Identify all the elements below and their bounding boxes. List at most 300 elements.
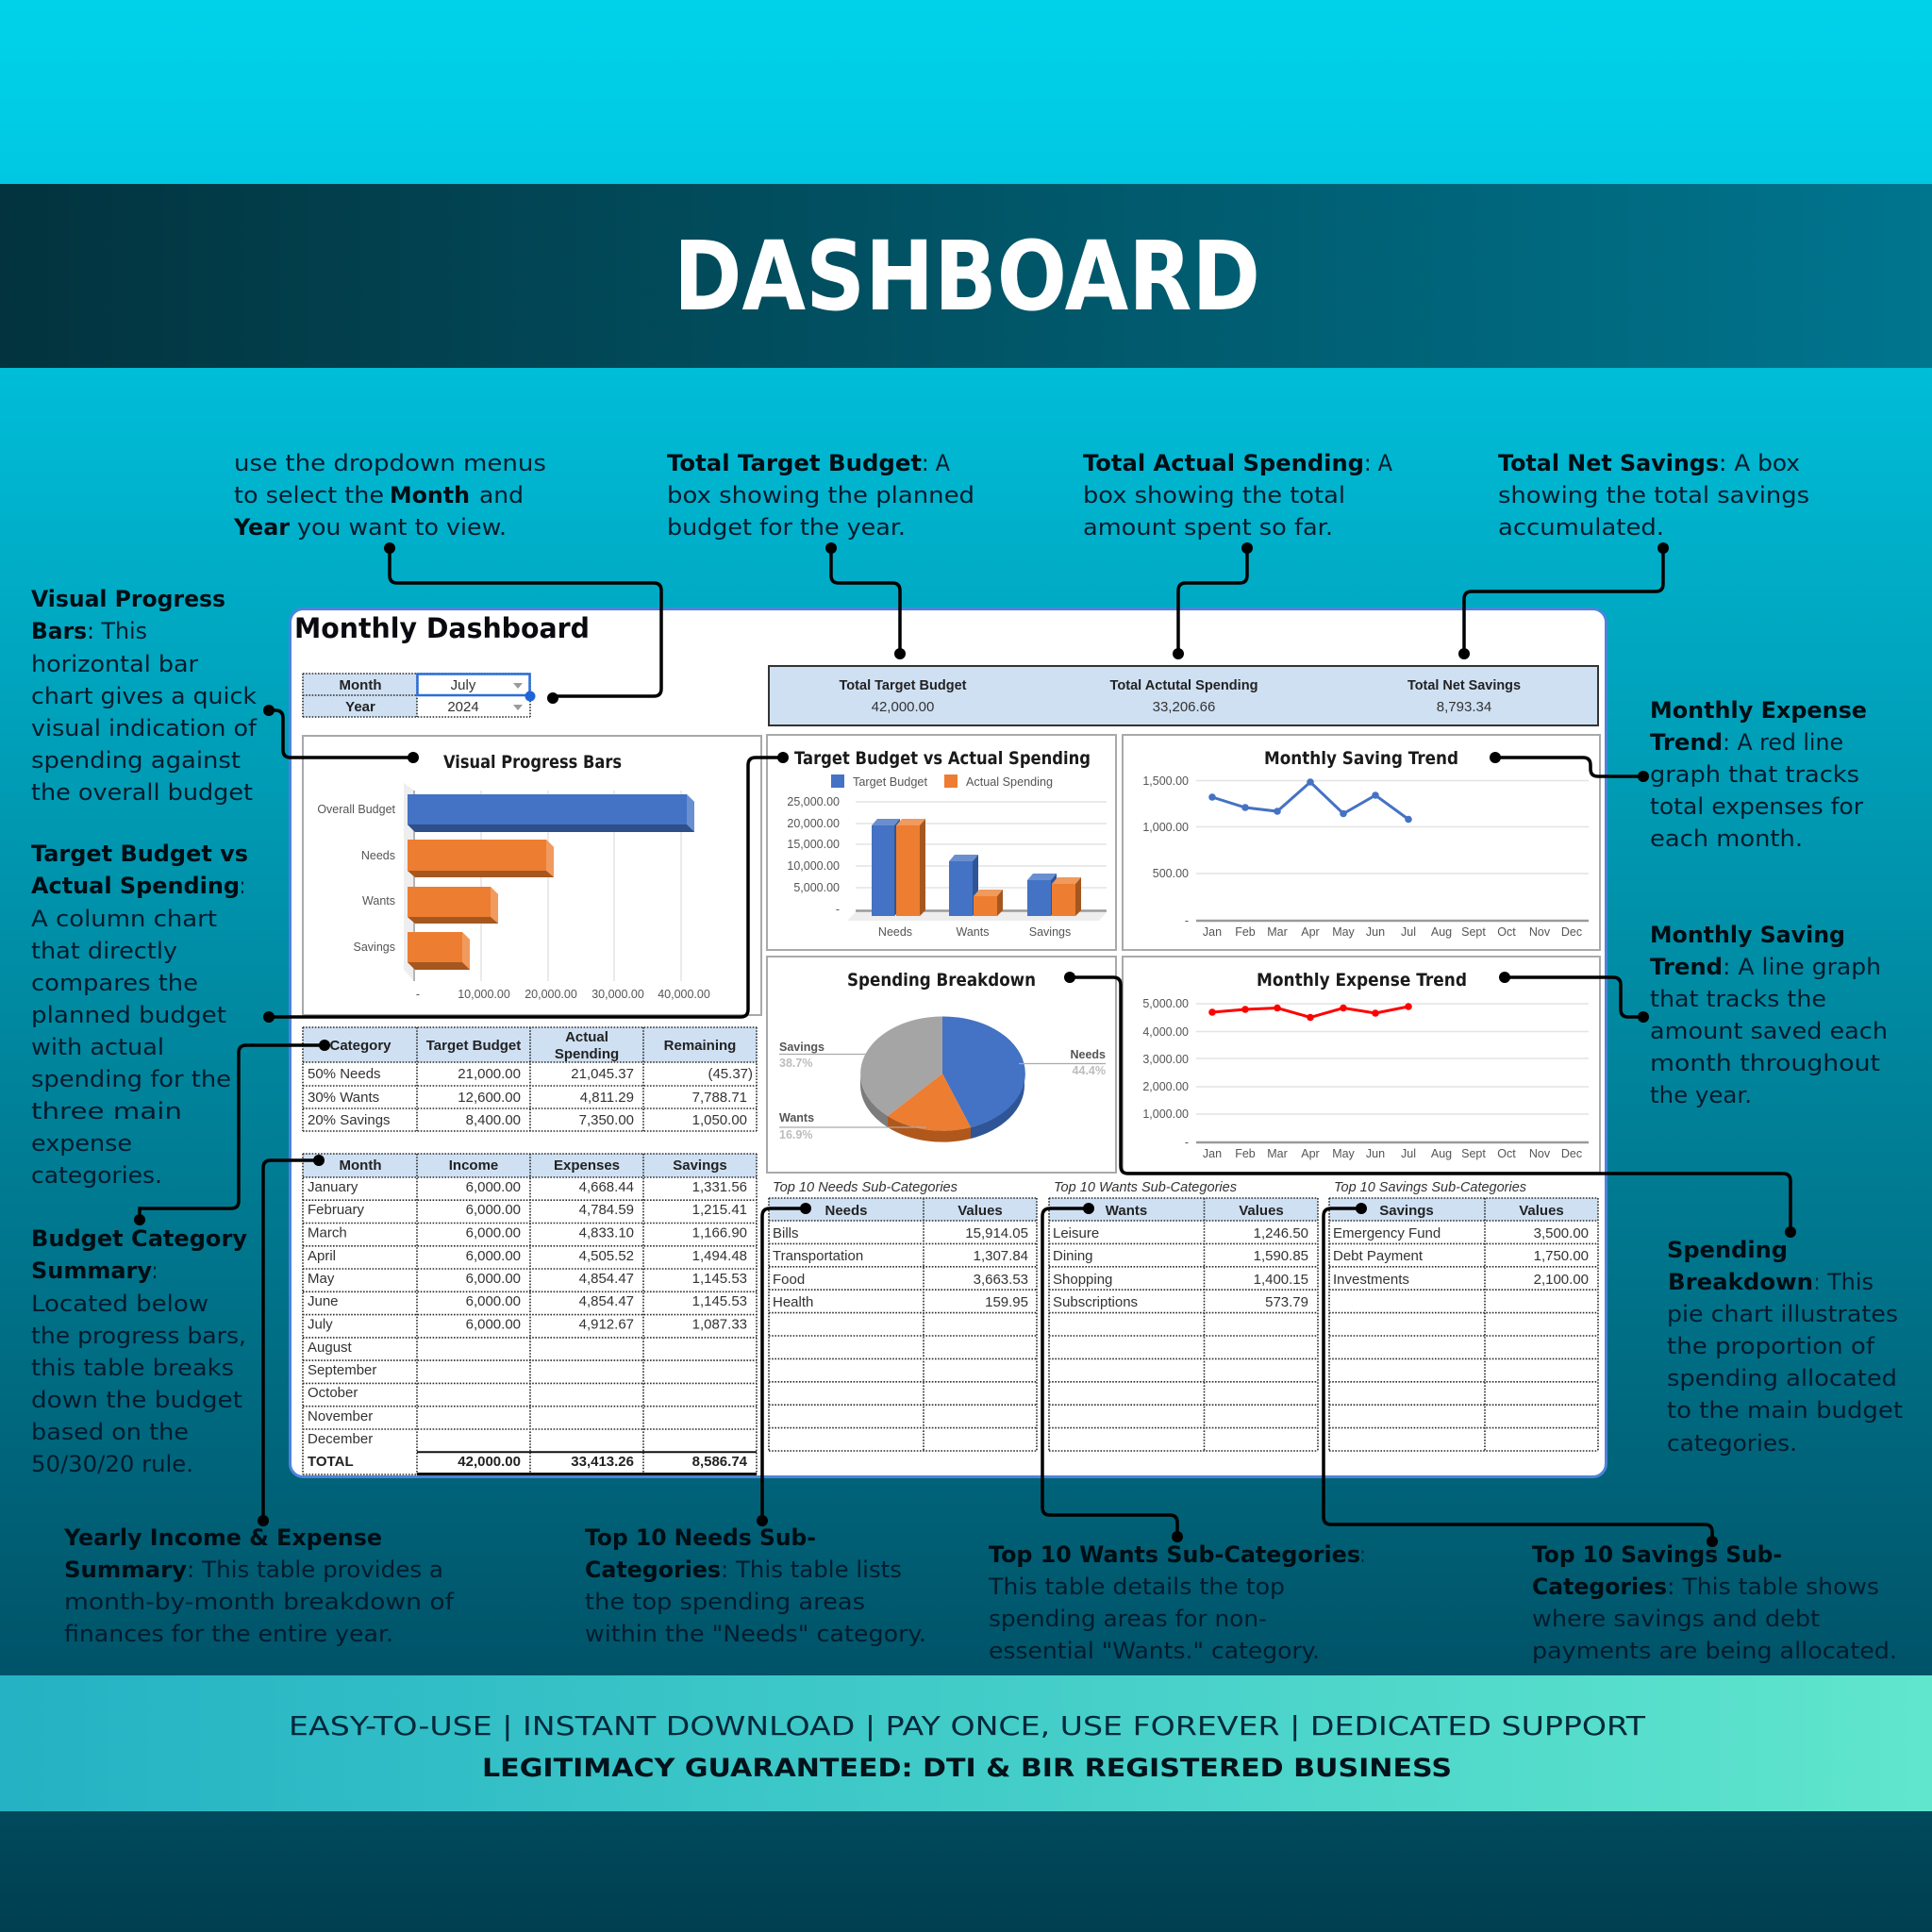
bottom dark band [0, 1811, 1932, 1932]
chart: target budget vs actual spending: Wants [957, 925, 989, 939]
callout: yearly income and expense summary: finances for the entire year. [64, 1621, 393, 1647]
callout: target budget vs actual spending: compares the [31, 970, 198, 996]
chart: monthly saving trend: Sept [1461, 925, 1486, 939]
table: yearly income and expense summary: June [308, 1293, 339, 1309]
table: top 10 needs: 159.95 [985, 1294, 1028, 1310]
callout: spending breakdown: Spending [1667, 1237, 1788, 1263]
table: budget category summary: 1,050.00 [692, 1112, 747, 1128]
chart: monthly expense trend: Monthly Expense Trend [1257, 970, 1467, 991]
callout: budget category summary: based on the [31, 1419, 189, 1445]
callout: spending breakdown: to the main budget [1667, 1397, 1903, 1424]
callout: dropdown menus: you want to view. [297, 514, 507, 541]
arrow: top needs connector [757, 1203, 811, 1526]
callout: target budget vs actual spending: that directly [31, 938, 177, 964]
callout: target budget vs actual spending: planned budget [31, 1002, 226, 1028]
table: yearly income and expense summary: 1,331.56 [692, 1179, 747, 1195]
callout: monthly expense trend: total expenses for [1650, 793, 1863, 820]
callout: budget category summary: : [152, 1257, 158, 1284]
chart: monthly expense trend: - [1185, 1136, 1189, 1149]
table: yearly income and expense summary: 1,145.53 [692, 1293, 747, 1309]
table: budget category summary: 7,350.00 [579, 1112, 634, 1128]
chart: monthly expense trend: May [1332, 1147, 1356, 1160]
chart: spending breakdown pie: Wants [779, 1111, 814, 1124]
chart: monthly saving trend: 1,000.00 [1142, 821, 1189, 834]
table: yearly income and expense summary: TOTAL [308, 1454, 354, 1470]
chart: visual progress bars: - [416, 988, 420, 1001]
summary box: totals: Total Net Savings [1407, 677, 1521, 693]
table: yearly income and expense summary: 6,000.00 [466, 1248, 521, 1264]
callout: total net savings [1498, 450, 1809, 541]
callout: monthly expense trend: : A red line [1723, 729, 1843, 756]
chart: monthly expense trend: 2,000.00 [1142, 1080, 1189, 1093]
chart: monthly expense trend: 4,000.00 [1142, 1025, 1189, 1039]
table: yearly income and expense summary: Expenses [554, 1158, 620, 1174]
callout: monthly expense trend: Trend [1650, 729, 1723, 756]
arrow: spending breakdown connector [1064, 972, 1796, 1238]
table: top 10 wants: Leisure [1053, 1225, 1099, 1241]
callout: target budget vs actual spending: A column chart [31, 906, 217, 932]
chart: target budget vs actual spending: 15,000.00 [787, 838, 840, 851]
month and year selector: Year [345, 699, 375, 715]
callout: monthly saving trend: Monthly Saving [1650, 922, 1845, 948]
chart: visual progress bars: Overall Budget [317, 803, 396, 816]
callout: budget category summary: Budget Category [31, 1225, 247, 1252]
table: top 10 needs: Values [958, 1203, 1003, 1219]
arrow: total net savings connector [1458, 542, 1669, 659]
chart: spending breakdown pie [767, 957, 1116, 1173]
callout: visual progress bars: visual indication of [31, 715, 258, 741]
callout: total target budget: Total Target Budget [667, 450, 922, 476]
chart: monthly saving trend: Oct [1497, 925, 1516, 939]
table: budget category summary: 7,788.71 [692, 1090, 747, 1106]
arrow: total actual spending connector [1173, 542, 1253, 659]
chart: target budget vs actual spending: Needs [878, 925, 912, 939]
table: yearly income and expense summary: March [308, 1224, 347, 1241]
chart: spending breakdown pie: 16.9% [779, 1128, 812, 1141]
table: top 10 wants: Wants [1106, 1203, 1147, 1219]
table: yearly income and expense summary: 42,000.00 [458, 1454, 521, 1470]
callout: visual progress bars: the overall budget [31, 779, 253, 806]
table: top 10 savings: 3,500.00 [1534, 1225, 1589, 1241]
callout: monthly expense trend: each month. [1650, 825, 1803, 852]
chart: monthly saving trend: 1,500.00 [1142, 774, 1189, 788]
table: budget category summary: Actual [565, 1029, 608, 1045]
chart: target budget vs actual spending: 20,000.00 [787, 817, 840, 830]
arrow: top savings connector [1324, 1203, 1718, 1547]
table: yearly income and expense summary: October [308, 1385, 358, 1401]
table: budget category summary: 50% Needs [308, 1066, 381, 1082]
callout: visual progress bars: : This [87, 618, 147, 644]
arrow: month and year connector [384, 542, 661, 704]
callout: target budget vs actual spending: three main [31, 1098, 182, 1124]
table: top 10 savings [1329, 1179, 1598, 1451]
chart: spending breakdown pie: Savings [779, 1041, 824, 1054]
callout: monthly expense trend [1650, 697, 1867, 852]
chart: monthly expense trend: 5,000.00 [1142, 997, 1189, 1010]
table: top 10 wants: Dining [1053, 1248, 1093, 1264]
callout: monthly expense trend: graph that tracks [1650, 761, 1859, 788]
table: yearly income and expense summary: 6,000.00 [466, 1271, 521, 1287]
table: budget category summary [303, 1027, 757, 1131]
callout: dropdown menus: Month [390, 482, 470, 508]
callout: visual progress bars: Bars [31, 618, 87, 644]
callout: spending breakdown: pie chart illustrates [1667, 1301, 1898, 1327]
table: top 10 savings: Values [1519, 1203, 1564, 1219]
table: yearly income and expense summary: Savings [673, 1158, 727, 1174]
month and year selector: Month [340, 677, 381, 693]
summary box: totals: Total Target Budget [840, 677, 966, 693]
callout: total target budget: box showing the planned [667, 482, 974, 508]
callout: monthly saving trend: Trend [1650, 954, 1723, 980]
arrow: budget category summary connector [134, 1040, 330, 1225]
callout: top 10 needs: the top spending areas [585, 1589, 865, 1615]
table: yearly income and expense summary: 8,586.74 [692, 1454, 748, 1470]
callout: target budget vs actual spending: categories. [31, 1162, 162, 1189]
table: yearly income and expense summary: 4,505.52 [579, 1248, 634, 1264]
table: top 10 savings: Debt Payment [1333, 1248, 1424, 1264]
callout: monthly saving trend: amount saved each [1650, 1018, 1888, 1044]
chart: monthly expense trend: Mar [1267, 1147, 1288, 1160]
table: yearly income and expense summary [303, 1154, 757, 1474]
footer band: EASY-TO-USE | INSTANT DOWNLOAD | PAY ONCE, USE FOREVER | DEDICATED SUPPORT [289, 1710, 1646, 1741]
chart: monthly expense trend: Nov [1529, 1147, 1551, 1160]
table: top 10 wants: 1,590.85 [1254, 1248, 1308, 1264]
table: top 10 wants [1049, 1179, 1318, 1451]
chart: spending breakdown pie: 38.7% [779, 1057, 812, 1070]
callout: target budget vs actual spending [31, 841, 248, 1189]
callout: yearly income and expense summary: Yearly Income & Expense [63, 1524, 382, 1551]
table: top 10 needs: 3,663.53 [974, 1272, 1028, 1288]
table: yearly income and expense summary: 1,215.41 [692, 1202, 747, 1218]
table: budget category summary: Remaining [664, 1038, 736, 1054]
callout: total actual spending: box showing the total [1083, 482, 1345, 508]
callout: top 10 needs: Top 10 Needs Sub- [585, 1524, 816, 1551]
table: top 10 savings: 1,750.00 [1534, 1248, 1589, 1264]
callout: top 10 savings: Categories [1532, 1574, 1667, 1600]
callout: spending breakdown: This [1826, 1269, 1874, 1295]
chart: monthly saving trend: Jul [1401, 925, 1416, 939]
table: yearly income and expense summary: Month [340, 1158, 381, 1174]
arrow: total target budget connector [825, 542, 906, 659]
table: yearly income and expense summary: 4,668.44 [579, 1179, 634, 1195]
table: budget category summary: Target Budget [426, 1038, 521, 1054]
callout: dropdown menus: use the dropdown menus [234, 450, 546, 476]
table: yearly income and expense summary: April [308, 1248, 336, 1264]
callout: spending breakdown: categories. [1667, 1430, 1797, 1457]
chart: target budget vs actual spending: 10,000.00 [787, 859, 840, 873]
chart: target budget vs actual spending [767, 735, 1116, 950]
callout: budget category summary: Summary [31, 1257, 152, 1284]
callout: dropdown menus: Year [233, 514, 290, 541]
chart: monthly saving trend: Jan [1203, 925, 1222, 939]
table: yearly income and expense summary: August [308, 1340, 353, 1356]
table: budget category summary: 20% Savings [308, 1112, 391, 1128]
table: yearly income and expense summary: 6,000.00 [466, 1293, 521, 1309]
chart: monthly saving trend: Dec [1561, 925, 1582, 939]
table: yearly income and expense summary: 4,854.47 [579, 1271, 634, 1287]
callout: target budget vs actual spending: Target Budget vs [31, 841, 248, 867]
callout: total net savings: Total Net Savings [1498, 450, 1719, 476]
callout: target budget vs actual spending: with actual [31, 1034, 164, 1060]
callout: top 10 wants: Top 10 Wants Sub-Categories [989, 1541, 1360, 1568]
table: yearly income and expense summary: December [308, 1431, 373, 1447]
chart: monthly saving trend: Mar [1267, 925, 1288, 939]
callout: budget category summary: Located below [31, 1291, 208, 1317]
callout: monthly saving trend: : A line graph [1723, 954, 1881, 980]
footer band [0, 1675, 1932, 1811]
callout: total net savings: : A box [1719, 450, 1800, 476]
chart: monthly expense trend: 3,000.00 [1142, 1053, 1189, 1066]
chart: monthly saving trend: Feb [1235, 925, 1256, 939]
callout: monthly expense trend: Monthly Expense [1650, 697, 1867, 724]
callout: target budget vs actual spending: spending for the [31, 1066, 231, 1092]
callout: spending breakdown: spending allocated [1667, 1365, 1897, 1391]
arrow: monthly expense trend connector [1490, 752, 1649, 782]
arrow: yearly summary connector [258, 1155, 325, 1526]
table: yearly income and expense summary: 1,145.53 [692, 1271, 747, 1287]
callout: visual progress bars: horizontal bar [31, 651, 198, 677]
callout: top 10 savings [1532, 1541, 1897, 1664]
chart: visual progress bars: 10,000.00 [458, 988, 510, 1001]
chart: visual progress bars: 20,000.00 [525, 988, 577, 1001]
arrow: monthly saving trend connector [1499, 972, 1649, 1023]
table: yearly income and expense summary: 4,854.47 [579, 1293, 634, 1309]
panel: dashboard card [291, 609, 1606, 1477]
table: top 10 savings: Investments [1333, 1272, 1409, 1288]
callout: budget category summary: 50/30/20 rule. [31, 1451, 193, 1477]
callout: target budget vs actual spending: expense [31, 1130, 132, 1157]
chart: spending breakdown pie: 44.4% [1073, 1064, 1106, 1077]
callout: monthly saving trend: month throughout [1650, 1050, 1880, 1076]
callout: top 10 needs: Categories [585, 1557, 721, 1583]
chart: spending breakdown pie: Spending Breakdown [847, 970, 1036, 991]
table: top 10 wants: Subscriptions [1053, 1294, 1138, 1310]
table: top 10 needs: Needs [824, 1203, 868, 1219]
callout: total actual spending [1083, 450, 1393, 541]
table: top 10 wants: Values [1239, 1203, 1284, 1219]
table: top 10 savings: Top 10 Savings Sub-Categories [1334, 1179, 1526, 1195]
chart: visual progress bars: 30,000.00 [591, 988, 644, 1001]
chart: monthly expense trend: Apr [1301, 1147, 1320, 1160]
chart: visual progress bars: 40,000.00 [658, 988, 710, 1001]
summary box: totals: 42,000.00 [872, 699, 934, 715]
callout: top 10 needs [585, 1524, 926, 1647]
table: yearly income and expense summary: November [308, 1408, 373, 1424]
chart: monthly expense trend: Jun [1366, 1147, 1385, 1160]
table: top 10 needs: 15,914.05 [965, 1225, 1028, 1241]
table: yearly income and expense summary: January [308, 1179, 358, 1195]
chart: target budget vs actual spending: Target Budget vs Actual Spending [794, 748, 1091, 769]
table: top 10 wants: 1,400.15 [1254, 1272, 1308, 1288]
callout: top 10 savings: payments are being allocated. [1532, 1638, 1897, 1664]
summary box: totals: 8,793.34 [1437, 699, 1491, 715]
callout: total net savings: showing the total savings [1498, 482, 1809, 508]
chart: spending breakdown pie: Needs [1070, 1048, 1106, 1061]
chart: monthly saving trend: Jun [1366, 925, 1385, 939]
table: budget category summary: 21,000.00 [458, 1066, 521, 1082]
table: top 10 needs: 1,307.84 [974, 1248, 1028, 1264]
table: budget category summary: Category [329, 1038, 391, 1054]
chart: monthly expense trend: Dec [1561, 1147, 1582, 1160]
table: top 10 savings: Emergency Fund [1333, 1225, 1441, 1241]
chart: monthly saving trend: Monthly Saving Trend [1264, 748, 1458, 769]
chart: monthly saving trend: May [1332, 925, 1356, 939]
chart: monthly saving trend: Apr [1301, 925, 1320, 939]
summary box: totals [769, 666, 1598, 725]
callout: dropdown menus: and [479, 482, 524, 508]
callout: total target budget: : A [922, 450, 951, 476]
callout: top 10 wants: : [1360, 1541, 1365, 1568]
table: budget category summary: 30% Wants [308, 1090, 379, 1106]
chart: monthly expense trend: Jan [1203, 1147, 1222, 1160]
callout: monthly saving trend [1650, 922, 1888, 1108]
callout: spending breakdown: the proportion of [1667, 1333, 1875, 1359]
table: yearly income and expense summary: 6,000.00 [466, 1317, 521, 1332]
callout: yearly income and expense summary: month-by-month breakdown of [64, 1589, 455, 1615]
callout: top 10 savings: where savings and debt [1532, 1606, 1820, 1632]
callout: visual progress bars [31, 586, 258, 806]
table: yearly income and expense summary: 6,000.00 [466, 1179, 521, 1195]
arrow: visual progress bars connector [263, 705, 419, 763]
heading: Monthly Dashboard: Monthly Dashboard [294, 612, 590, 644]
callout: top 10 needs: within the "Needs" category. [585, 1621, 926, 1647]
summary box: totals: Total Actutal Spending [1109, 677, 1258, 693]
table: yearly income and expense summary: September [308, 1362, 376, 1378]
callout: top 10 wants [988, 1541, 1365, 1664]
callout: spending breakdown: : [1814, 1269, 1820, 1295]
table: top 10 needs: Health [773, 1294, 813, 1310]
callout: budget category summary: this table breaks [31, 1355, 234, 1381]
chart: monthly expense trend: Sept [1461, 1147, 1486, 1160]
callout: monthly saving trend: that tracks the [1650, 986, 1826, 1012]
callout: visual progress bars: Visual Progress [31, 586, 225, 612]
chart: visual progress bars: Visual Progress Bars [443, 752, 622, 773]
arrow: top wants connector [1042, 1203, 1183, 1542]
chart: visual progress bars: Needs [361, 849, 395, 862]
chart: monthly expense trend [1123, 957, 1600, 1173]
table: budget category summary: (45.37) [708, 1066, 753, 1082]
chart: target budget vs actual spending: - [836, 903, 840, 916]
callout: top 10 wants: This table details the top [988, 1574, 1285, 1600]
table: yearly income and expense summary: 33,413.26 [571, 1454, 634, 1470]
month and year selector [303, 674, 536, 717]
callout: spending breakdown: Breakdown [1668, 1269, 1813, 1295]
callout: dropdown menus: to select the [234, 482, 384, 508]
table: yearly income and expense summary: 4,784.59 [579, 1202, 634, 1218]
arrow: target budget vs actual connector [263, 752, 789, 1023]
callout: total actual spending: Total Actual Spending [1083, 450, 1364, 476]
chart: target budget vs actual spending: 25,000.00 [787, 795, 840, 808]
callout: visual progress bars: chart gives a quick [31, 683, 257, 709]
table: top 10 wants: 1,246.50 [1254, 1225, 1308, 1241]
chart: visual progress bars: Wants [362, 894, 395, 908]
table: top 10 needs: Food [773, 1272, 805, 1288]
footer band: LEGITIMACY GUARANTEED: DTI & BIR REGISTERED BUSINESS [482, 1754, 1452, 1783]
chart: monthly saving trend: 500.00 [1153, 867, 1189, 880]
table: budget category summary: 21,045.37 [571, 1066, 634, 1082]
callout: top 10 savings: Top 10 Savings Sub- [1532, 1541, 1782, 1568]
table: budget category summary: Spending [555, 1046, 619, 1062]
chart: target budget vs actual spending: Actual Spending [966, 775, 1053, 789]
chart: monthly saving trend [1123, 735, 1600, 950]
month and year selector: July [451, 677, 476, 693]
table: top 10 needs: Transportation [773, 1248, 863, 1264]
callout: spending breakdown [1667, 1237, 1903, 1457]
callout: top 10 savings: : This table shows [1667, 1574, 1879, 1600]
table: yearly income and expense summary: 4,912.67 [579, 1317, 634, 1332]
callout: monthly saving trend: the year. [1650, 1082, 1752, 1108]
table: budget category summary: 8,400.00 [466, 1112, 521, 1128]
table: top 10 wants: 573.79 [1265, 1294, 1308, 1310]
callout: visual progress bars: spending against [31, 747, 241, 774]
callout: target budget vs actual spending: Actual Spending [31, 873, 240, 899]
month and year selector: 2024 [447, 699, 479, 715]
table: top 10 savings: 2,100.00 [1534, 1272, 1589, 1288]
table: budget category summary: 4,811.29 [580, 1090, 634, 1106]
callout: target budget vs actual spending: : [240, 873, 245, 899]
chart: monthly saving trend: Aug [1431, 925, 1452, 939]
table: top 10 savings: Savings [1379, 1203, 1434, 1219]
callout: budget category summary: the progress bars, [31, 1323, 246, 1349]
table: yearly income and expense summary: February [308, 1202, 365, 1218]
title banner: DASHBOARD [674, 221, 1260, 333]
table: budget category summary: 12,600.00 [458, 1090, 521, 1106]
callout: total target budget [667, 450, 974, 541]
table: yearly income and expense summary: 4,833.10 [579, 1224, 634, 1241]
chart: monthly saving trend: Nov [1529, 925, 1551, 939]
chart: visual progress bars [303, 736, 761, 1015]
callout: yearly income and expense summary: : This table provides a [187, 1557, 443, 1583]
table: top 10 wants: Top 10 Wants Sub-Categories [1054, 1179, 1237, 1195]
callout: budget category summary [31, 1225, 247, 1477]
callout: top 10 wants: essential "Wants." category. [989, 1638, 1320, 1664]
top cyan band [0, 0, 1932, 184]
chart: monthly saving trend: - [1185, 914, 1189, 927]
callout: total target budget: budget for the year. [667, 514, 906, 541]
table: yearly income and expense summary: May [308, 1271, 335, 1287]
table: yearly income and expense summary: July [308, 1317, 333, 1332]
callout: budget category summary: down the budget [31, 1387, 242, 1413]
chart: target budget vs actual spending: Savings [1029, 925, 1071, 939]
callout: dropdown menus [233, 450, 546, 541]
callout: total actual spending: : A [1364, 450, 1393, 476]
chart: target budget vs actual spending: Target Budget [853, 775, 928, 789]
chart: monthly expense trend: Oct [1497, 1147, 1516, 1160]
callout: top 10 wants: spending areas for non- [989, 1606, 1267, 1632]
table: yearly income and expense summary: Income [449, 1158, 498, 1174]
title banner [0, 184, 1932, 368]
table: yearly income and expense summary: 1,494.48 [692, 1248, 747, 1264]
table: yearly income and expense summary: 6,000.00 [466, 1202, 521, 1218]
main gradient background [0, 368, 1932, 1675]
table: top 10 needs [769, 1179, 1037, 1451]
chart: monthly expense trend: 1,000.00 [1142, 1108, 1189, 1121]
table: yearly income and expense summary: 6,000.00 [466, 1224, 521, 1241]
callout: total actual spending: amount spent so far. [1083, 514, 1333, 541]
chart: monthly expense trend: Aug [1431, 1147, 1452, 1160]
table: top 10 needs: Top 10 Needs Sub-Categories [773, 1179, 958, 1195]
table: yearly income and expense summary: 1,166.90 [692, 1224, 747, 1241]
chart: monthly expense trend: Feb [1235, 1147, 1256, 1160]
chart: target budget vs actual spending: 5,000.00 [793, 881, 840, 894]
chart: monthly expense trend: Jul [1401, 1147, 1416, 1160]
callout: yearly income and expense summary: Summary [64, 1557, 187, 1583]
callout: total net savings: accumulated. [1498, 514, 1664, 541]
table: top 10 wants: Shopping [1053, 1272, 1112, 1288]
table: top 10 needs: Bills [773, 1225, 799, 1241]
chart: visual progress bars: Savings [354, 941, 395, 954]
summary box: totals: 33,206.66 [1153, 699, 1215, 715]
